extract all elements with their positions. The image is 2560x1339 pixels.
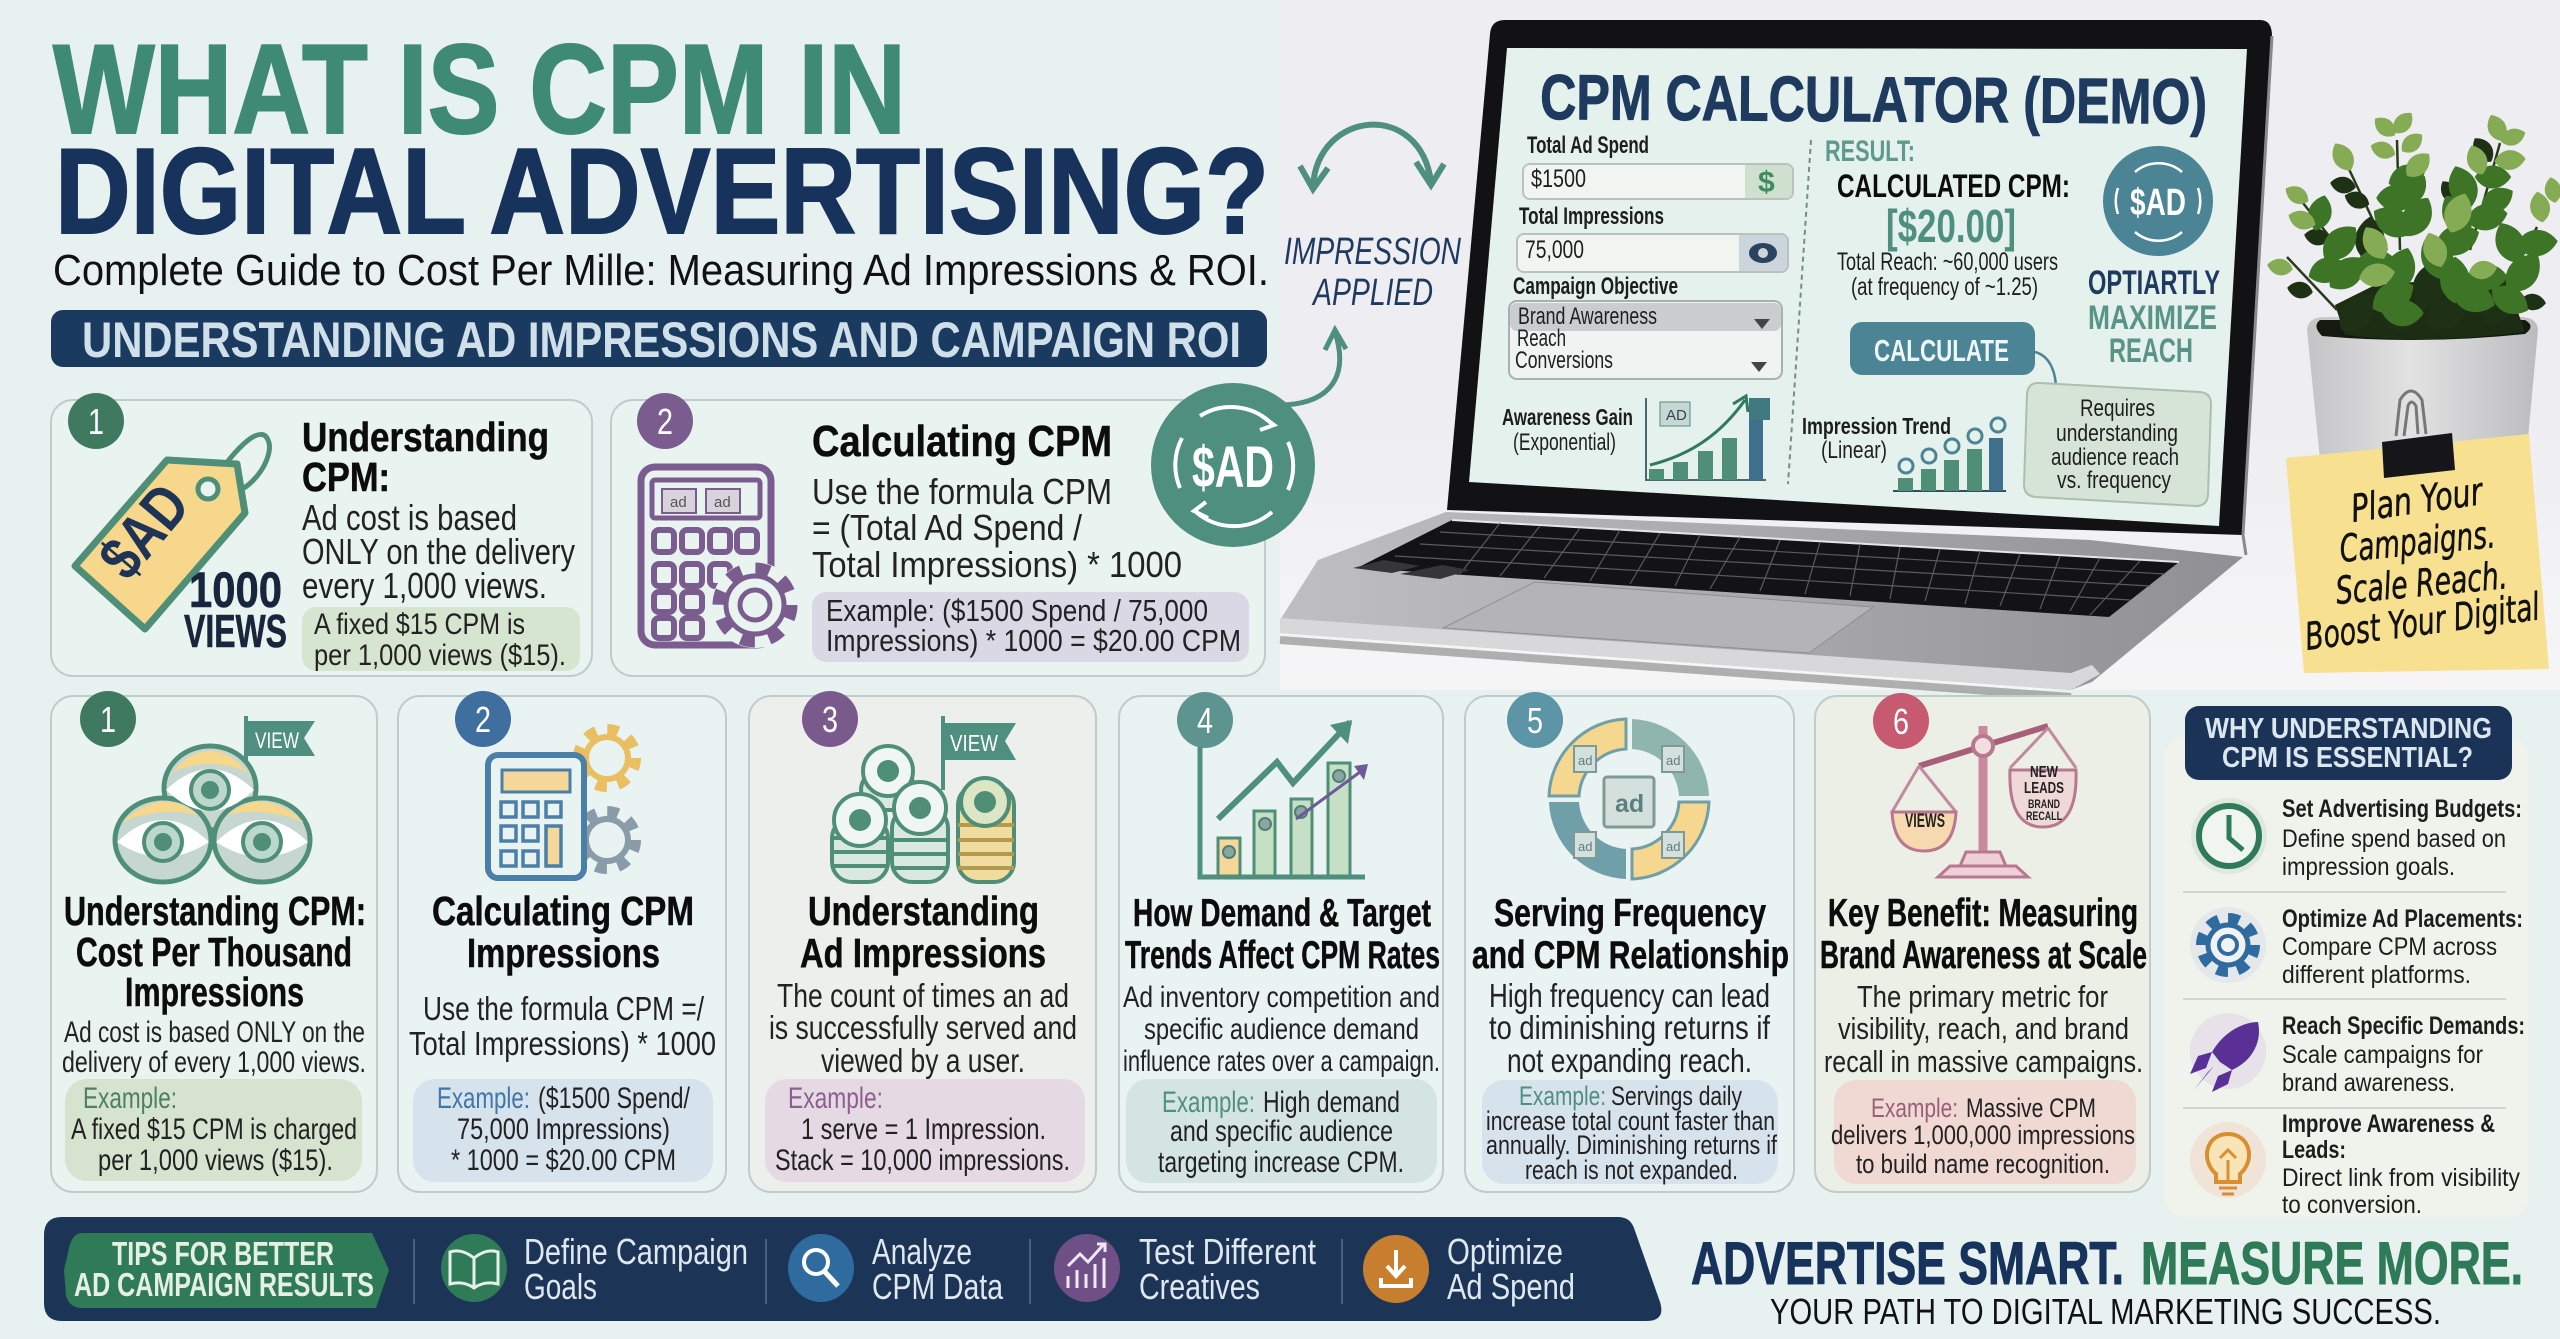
tip: optimize spend: Optimize	[1447, 1231, 1563, 1272]
icon: price tag: $AD	[86, 471, 203, 592]
pot	[2307, 317, 2538, 460]
body: is successfully served and	[769, 1009, 1077, 1046]
icon: calculator and gear: ad	[714, 494, 731, 511]
badge: 1	[100, 699, 116, 740]
title	[53, 18, 1269, 259]
awareness gain chart	[1502, 396, 1770, 480]
callout: requires understanding: vs. frequency	[2057, 467, 2171, 494]
title: WHAT IS CPM IN	[53, 18, 906, 160]
panel header: WHY UNDERSTANDING	[2205, 713, 2492, 745]
example box: reach is not expanded.	[1525, 1155, 1738, 1185]
panel header: CPM IS ESSENTIAL?	[2222, 742, 2473, 774]
item: improve awareness: Leads:	[2282, 1136, 2346, 1164]
icon: ad ring: ad	[1578, 839, 1592, 854]
example box: Example:	[788, 1082, 883, 1115]
tip: define goals	[441, 1231, 748, 1307]
heading	[64, 888, 366, 1015]
arrows: impression cycle	[1300, 125, 1444, 189]
input: total impressions	[1517, 203, 1788, 272]
heading: CPM:	[302, 454, 390, 500]
example box: Massive CPM	[1966, 1093, 2096, 1123]
example box: Example:	[437, 1082, 530, 1115]
awareness gain chart: (Exponential)	[1513, 429, 1616, 456]
1000 views label: VIEWS	[184, 605, 287, 657]
item: reach demands: Scale campaigns for	[2282, 1041, 2483, 1069]
heading: Key Benefit: Measuring	[1828, 892, 2138, 935]
leaves	[2266, 108, 2560, 340]
divider	[1788, 140, 1811, 484]
icon: $AD circle	[1151, 330, 1346, 547]
icon: coin stacks with eyes: VIEW	[950, 730, 998, 756]
heading: Trends Affect CPM Rates	[1125, 934, 1440, 977]
impression trend chart: Impression Trend	[1802, 413, 1951, 439]
body text	[812, 471, 1182, 585]
example box: 75,000 Impressions)	[457, 1113, 670, 1146]
item: set budgets	[2191, 795, 2522, 881]
awareness gain chart: AD	[1666, 407, 1687, 424]
heading: and CPM Relationship	[1472, 934, 1789, 977]
icon: balance scale	[1892, 726, 2076, 877]
optimize reach text: MAXIMIZE	[2088, 299, 2217, 337]
body: The primary metric for	[1857, 979, 2108, 1014]
heading: Ad Impressions	[800, 930, 1046, 976]
result block: (at frequency of ~1.25)	[1851, 273, 2038, 301]
card 5: serving frequency	[1465, 692, 1794, 1192]
heading: Impressions	[467, 930, 660, 976]
example box: and specific audience	[1170, 1115, 1393, 1148]
heading	[1125, 892, 1440, 977]
impression applied label: IMPRESSION	[1284, 231, 1461, 273]
example box: Stack = 10,000 impressions.	[775, 1144, 1070, 1177]
icon: screen $AD circle: $AD	[2130, 182, 2186, 224]
tip: define goals: Define Campaign	[524, 1231, 748, 1272]
example box: per 1,000 views ($15).	[314, 639, 566, 672]
card 4: demand and target trends	[1119, 692, 1443, 1192]
laptop lid	[1447, 20, 2272, 535]
icon: screen $AD circle	[2103, 146, 2213, 256]
example box: A fixed $15 CPM is	[314, 608, 525, 641]
result block: Total Reach: ~60,000 users	[1837, 248, 2058, 276]
impression trend chart	[1802, 413, 2006, 491]
heading	[800, 888, 1046, 976]
screen title: CPM CALCULATOR (DEMO)	[1540, 61, 2207, 138]
item: optimize placements	[2190, 905, 2523, 989]
badge: 5	[1527, 700, 1543, 741]
body text: Total Impressions) * 1000	[812, 544, 1182, 585]
callout: requires understanding: audience reach	[2051, 444, 2179, 471]
callout: requires understanding: understanding	[2056, 420, 2178, 447]
impression applied label	[1284, 231, 1461, 314]
item: set budgets: Define spend based on	[2282, 825, 2506, 853]
badge: 2	[475, 699, 491, 740]
icon: balance scale: RECALL	[2026, 809, 2062, 823]
body: Ad cost is based ONLY on the	[64, 1016, 365, 1049]
item: reach demands: brand awareness.	[2282, 1069, 2455, 1097]
icon: ad ring: ad	[1666, 753, 1680, 768]
tip: test creatives: Test Different	[1139, 1231, 1316, 1272]
input: total ad spend: Total Ad Spend	[1527, 132, 1649, 159]
heading: Brand Awareness at Scale	[1820, 934, 2147, 977]
title: DIGITAL ADVERTISING?	[55, 123, 1269, 259]
heading: Cost Per Thousand	[76, 929, 352, 975]
input: total impressions: 75,000	[1525, 236, 1584, 264]
body text: every 1,000 views.	[302, 565, 547, 606]
example box	[1831, 1080, 2136, 1184]
result block: CALCULATED CPM:	[1837, 168, 2070, 204]
badge: 3	[822, 699, 838, 740]
badge 1	[68, 393, 124, 449]
select: campaign objective: Reach	[1517, 325, 1566, 352]
body text: Ad cost is based	[302, 497, 517, 538]
body	[1123, 981, 1440, 1078]
sticky note	[2286, 391, 2549, 673]
icon: three eyes with flag	[115, 716, 315, 882]
icon: calculator and gear: ad	[670, 494, 687, 511]
example box: delivers 1,000,000 impressions	[1831, 1120, 2135, 1150]
tip: test creatives: Creatives	[1139, 1266, 1260, 1307]
result block: [$20.00]	[1886, 200, 2016, 252]
note text: Campaigns.	[2338, 512, 2497, 571]
note text: Plan Your	[2348, 469, 2487, 531]
example box	[812, 592, 1249, 662]
input: total ad spend	[1523, 132, 1793, 199]
body text: ONLY on the delivery	[302, 531, 575, 572]
body: The count of times an ad	[777, 977, 1069, 1014]
result block	[1825, 135, 2070, 301]
example box: 1 serve = 1 Impression.	[801, 1113, 1046, 1146]
item: optimize placements: different platforms.	[2282, 961, 2471, 989]
example box: A fixed $15 CPM is charged	[71, 1113, 357, 1146]
heading: Calculating CPM	[812, 417, 1112, 466]
body	[1824, 979, 2143, 1079]
heading	[432, 888, 694, 976]
heading: Understanding CPM:	[64, 888, 366, 934]
badge 2: 2	[657, 401, 673, 442]
tips bar	[44, 1217, 1661, 1321]
select: campaign objective: Brand Awareness	[1518, 303, 1657, 330]
example box: Example:	[1519, 1081, 1606, 1111]
example box: ($1500 Spend/	[538, 1082, 691, 1115]
example box: High demand	[1263, 1086, 1400, 1119]
example box: Example:	[83, 1082, 177, 1115]
body: influence rates over a campaign.	[1123, 1045, 1440, 1078]
heading: Calculating CPM	[432, 888, 694, 934]
icon: balance scale: NEW	[2030, 764, 2059, 781]
body text	[302, 497, 575, 606]
select: campaign objective: Campaign Objective	[1513, 273, 1678, 300]
impression applied label: APPLIED	[1312, 272, 1433, 314]
1000 views label: 1000	[189, 562, 282, 618]
tip: optimize spend: Ad Spend	[1447, 1266, 1575, 1307]
badge	[802, 691, 858, 747]
badge	[1873, 693, 1929, 749]
card 3: understanding ad impressions	[749, 691, 1096, 1192]
screen	[1469, 48, 2247, 526]
badge	[1507, 692, 1563, 748]
badge 1: 1	[88, 401, 104, 442]
optimize reach text: REACH	[2109, 332, 2193, 370]
example box: Example:	[1871, 1093, 1958, 1123]
tips label: AD CAMPAIGN RESULTS	[74, 1266, 374, 1303]
body: High frequency can lead	[1489, 977, 1770, 1014]
tip: optimize spend	[1363, 1231, 1575, 1307]
example box	[1126, 1079, 1437, 1183]
result block: RESULT:	[1825, 135, 1915, 168]
optimize reach text: OPTIARTLY	[2088, 264, 2220, 302]
impression trend chart: (Linear)	[1821, 437, 1887, 464]
icon: balance scale: BRAND	[2028, 797, 2060, 811]
example box: Servings daily	[1611, 1081, 1742, 1111]
example box	[65, 1079, 362, 1181]
heading: Understanding	[302, 414, 549, 460]
item: improve awareness	[2190, 1110, 2520, 1219]
body	[409, 990, 716, 1062]
body: to diminishing returns if	[1489, 1009, 1771, 1046]
example box: annually. Diminishing returns if	[1486, 1130, 1777, 1160]
tip: analyze data: Analyze	[872, 1231, 972, 1272]
card 1: understanding CPM	[51, 691, 377, 1192]
example box: Impressions) * 1000 = $20.00 CPM	[826, 623, 1241, 658]
note text	[2302, 469, 2542, 659]
body: delivery of every 1,000 views.	[62, 1046, 366, 1079]
heading	[302, 414, 549, 500]
heading: How Demand & Target	[1133, 892, 1431, 935]
card 6: key benefit	[1815, 693, 2150, 1192]
badge: 6	[1893, 701, 1909, 742]
item: improve awareness: to conversion.	[2282, 1191, 2422, 1219]
laptop base	[1280, 512, 2243, 697]
example box: Example:	[1162, 1086, 1255, 1119]
item: set budgets: impression goals.	[2282, 853, 2455, 881]
subtitle: Complete Guide to Cost Per Mille: Measuring Ad Impressions & ROI.	[53, 246, 1269, 295]
example box: Example: ($1500 Spend / 75,000	[826, 593, 1208, 628]
closing slogan: ADVERTISE SMART.	[1691, 1230, 2124, 1297]
icon: balance scale: VIEWS	[1905, 811, 1945, 832]
body: visibility, reach, and brand	[1838, 1011, 2129, 1046]
optimize reach text	[2088, 264, 2220, 370]
card 2: calculating CPM impressions	[398, 691, 726, 1192]
body text: = (Total Ad Spend /	[812, 507, 1082, 548]
panel header	[2185, 706, 2512, 780]
body: Total Impressions) * 1000	[409, 1025, 716, 1062]
body: recall in massive campaigns.	[1824, 1044, 2143, 1079]
callout: requires understanding: Requires	[2080, 395, 2155, 422]
input: total impressions: Total Impressions	[1519, 203, 1664, 230]
callout: requires understanding	[2024, 383, 2211, 506]
example box	[765, 1079, 1085, 1182]
tip: analyze data	[788, 1231, 1004, 1307]
icon: calculator and gear	[641, 467, 798, 648]
select: campaign objective	[1509, 273, 1782, 379]
tip: test creatives	[1054, 1231, 1316, 1307]
badge: 4	[1197, 700, 1213, 741]
potted plant	[2266, 108, 2560, 460]
section banner: UNDERSTANDING AD IMPRESSIONS AND CAMPAIGN ROI	[82, 312, 1241, 368]
icon: price tag	[75, 434, 269, 629]
icon: ad ring: ad	[1666, 839, 1680, 854]
icon: ad ring	[1549, 719, 1709, 879]
icon: coin stacks with eyes	[832, 716, 1016, 882]
body	[1489, 977, 1771, 1079]
input: total ad spend: $1500	[1531, 165, 1586, 193]
input: total ad spend: $	[1758, 166, 1775, 199]
select: campaign objective: Conversions	[1515, 347, 1613, 374]
panel: calculating CPM	[611, 393, 1265, 676]
icon: three eyes with flag: VIEW	[255, 728, 299, 753]
body: specific audience demand	[1144, 1013, 1419, 1046]
icon: calculator and gears	[488, 730, 635, 878]
item: reach demands	[2190, 1012, 2525, 1097]
heading: Serving Frequency	[1494, 892, 1766, 935]
icon: balance scale: LEADS	[2024, 780, 2064, 797]
body: viewed by a user.	[821, 1042, 1025, 1079]
example box: targeting increase CPM.	[1158, 1146, 1404, 1179]
example box	[302, 607, 580, 672]
example box: to build name recognition.	[1856, 1149, 2110, 1179]
icon: ad ring: ad	[1578, 753, 1592, 768]
heading	[1820, 892, 2147, 977]
example box: per 1,000 views ($15).	[98, 1144, 333, 1177]
item: optimize placements: Compare CPM across	[2282, 933, 2497, 961]
panel: understanding CPM	[51, 393, 592, 676]
keyboard	[1353, 520, 2179, 617]
body text: Use the formula CPM	[812, 471, 1112, 512]
item: improve awareness: Improve Awareness &	[2282, 1110, 2495, 1138]
badge	[455, 691, 511, 747]
closing slogan	[1691, 1230, 2523, 1332]
body	[769, 977, 1077, 1079]
heading: Impressions	[125, 969, 304, 1015]
body: Ad inventory competition and	[1123, 981, 1440, 1014]
heading: Understanding	[808, 888, 1039, 934]
badge 2	[637, 393, 693, 449]
tips label	[64, 1233, 389, 1308]
icon: ad ring: ad	[1615, 790, 1644, 818]
example box: increase total count faster than	[1486, 1106, 1775, 1136]
icon: $AD circle: $AD	[1192, 435, 1274, 500]
example box	[1482, 1080, 1778, 1185]
example box	[413, 1079, 713, 1182]
laptop	[1280, 20, 2272, 697]
panel: why understanding CPM is essential	[2164, 706, 2529, 1219]
body: not expanding reach.	[1507, 1042, 1752, 1079]
awareness gain chart: Awareness Gain	[1502, 404, 1633, 430]
badge	[80, 691, 136, 747]
example box: * 1000 = $20.00 CPM	[451, 1144, 676, 1177]
tip: define goals: Goals	[524, 1266, 597, 1307]
badge	[1177, 692, 1233, 748]
body	[62, 1016, 366, 1079]
tip: analyze data: CPM Data	[872, 1266, 1004, 1307]
calculate button	[1850, 322, 2056, 390]
tips label: TIPS FOR BETTER	[112, 1235, 334, 1272]
icon: rising chart	[1200, 720, 1368, 877]
calculate button: CALCULATE	[1874, 333, 2009, 368]
item: improve awareness: Direct link from visibility	[2282, 1164, 2520, 1192]
1000 views label	[184, 562, 287, 657]
body: Use the formula CPM =/	[423, 990, 705, 1027]
heading	[1472, 892, 1789, 977]
binder clip	[2382, 391, 2455, 478]
